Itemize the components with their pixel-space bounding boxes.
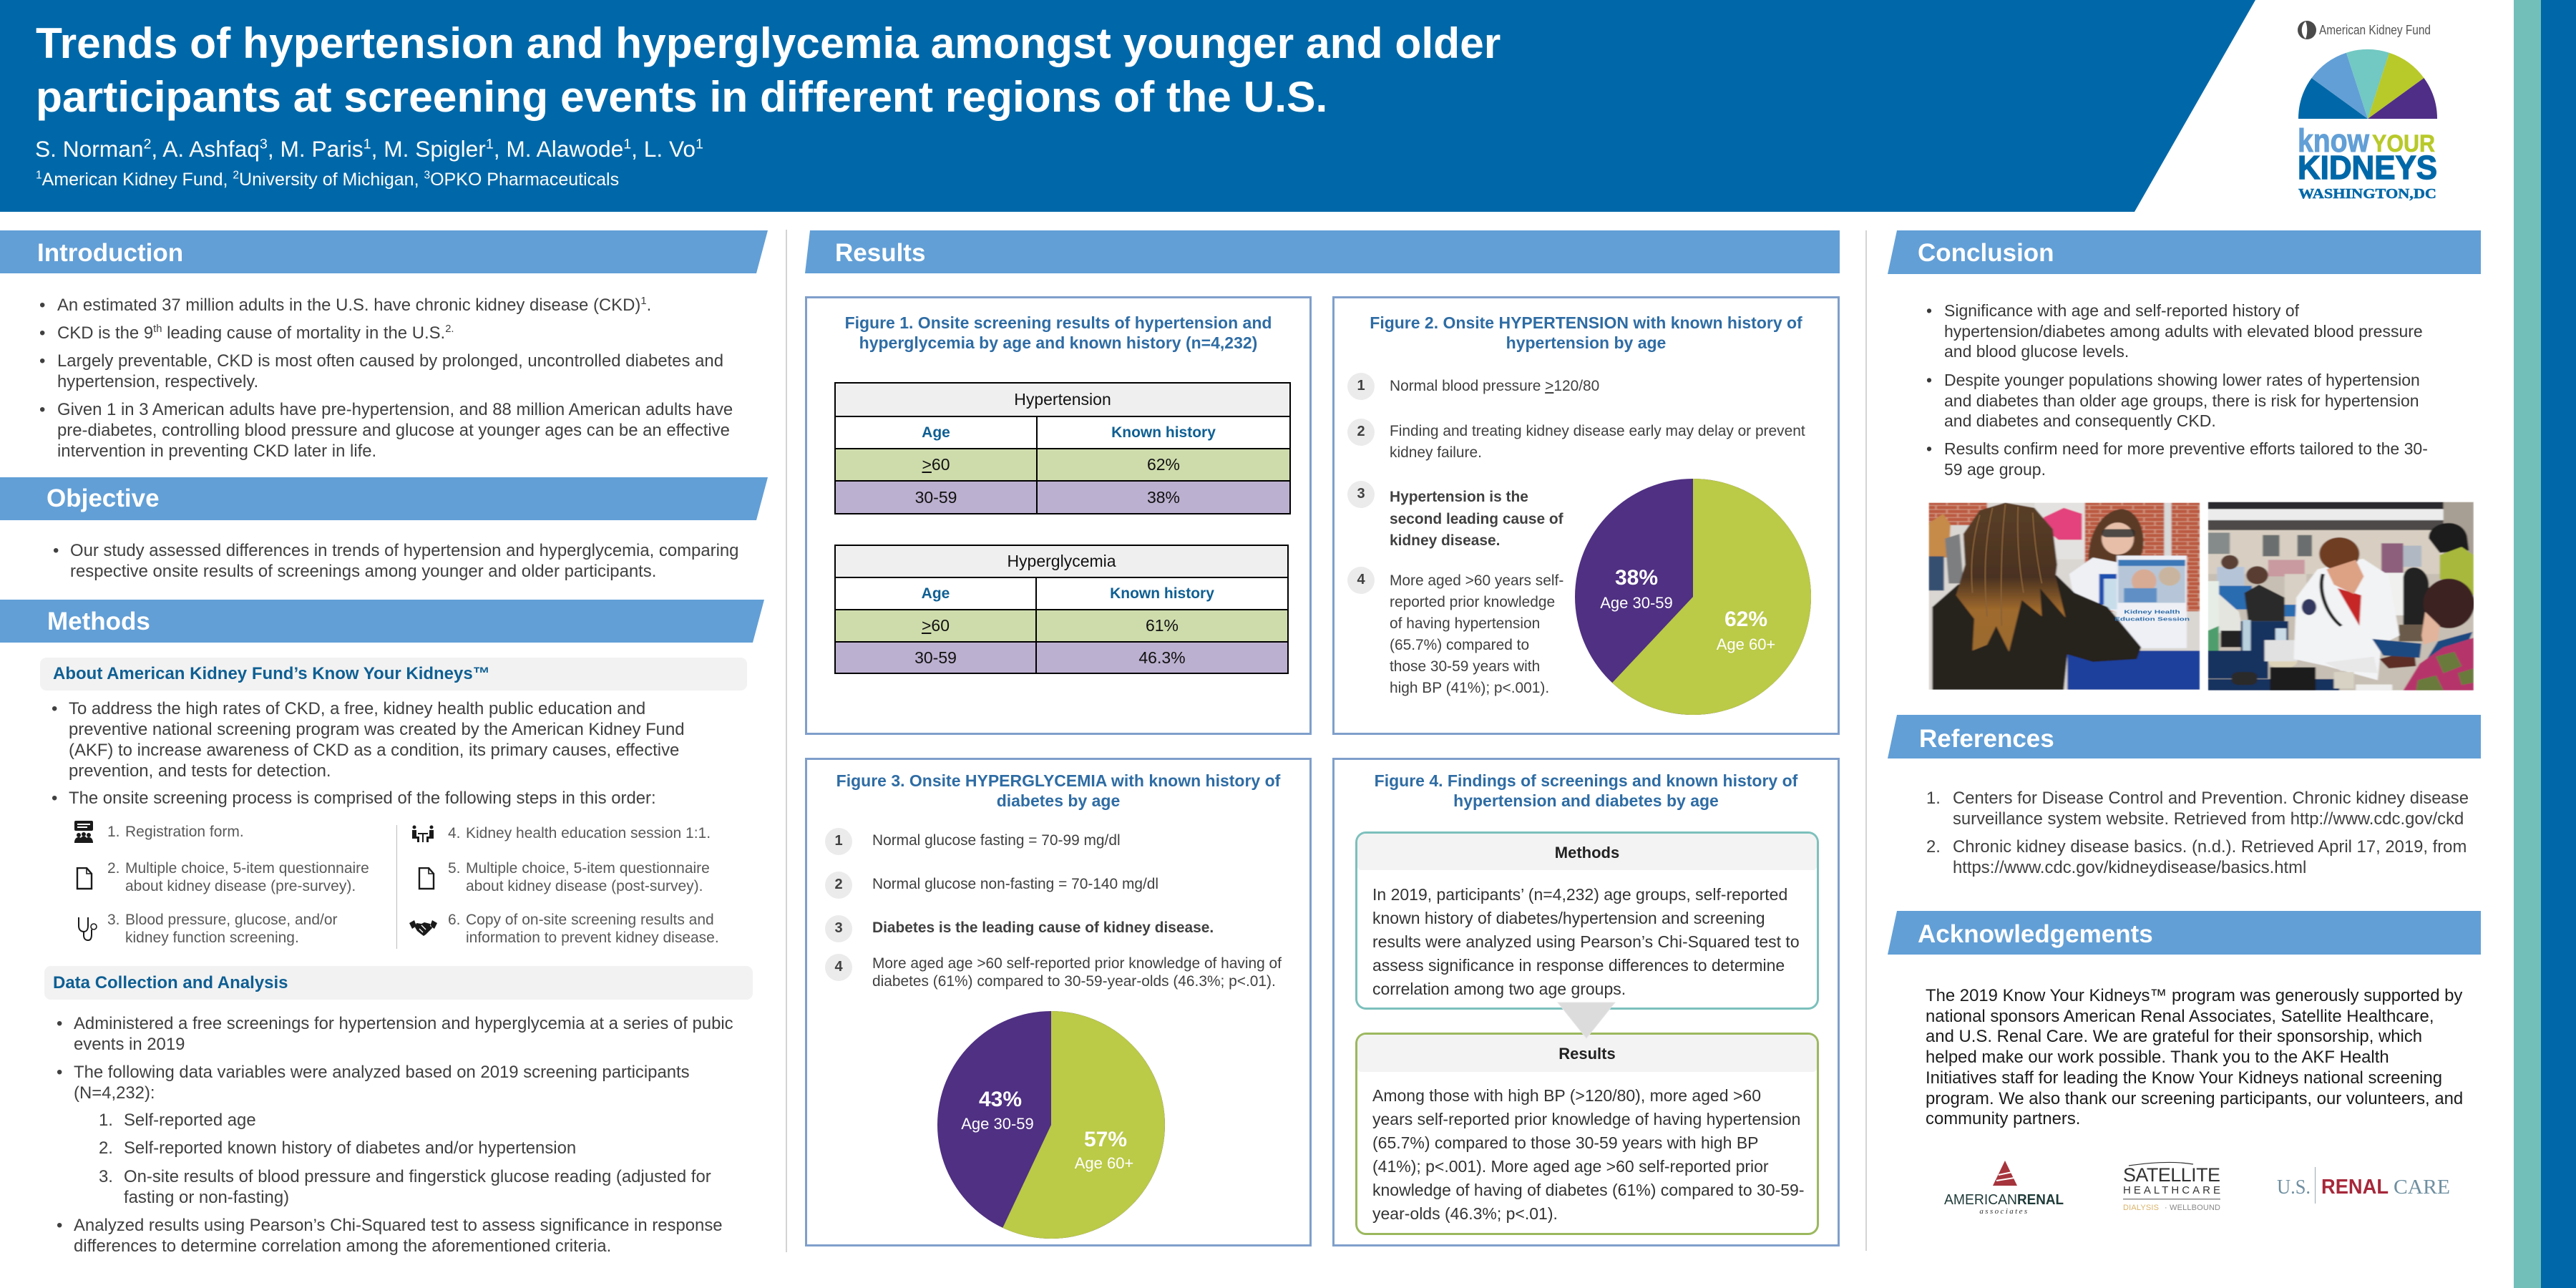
icon: American Kidney Fund mark: [2298, 21, 2316, 39]
table: hyperglycemia: >60: [922, 616, 950, 635]
logo wordmark: KIDNEYS: [2298, 149, 2437, 186]
pie chart: hypertension by age: [1575, 479, 1811, 715]
panel: Figure 2: [1332, 296, 1840, 735]
about bullets: [52, 699, 685, 808]
conclusion bullets: •: [1926, 371, 1932, 389]
step 1 with registration icon: Registration form.: [125, 824, 244, 840]
objective bullet: respective onsite results of screenings among younger and older participants.: [70, 562, 656, 581]
about bullets: preventive national screening program was created by the American Kidney Fund: [69, 720, 685, 739]
conclusion bullets: hypertension/diabetes among adults with elevated blood pressure: [1944, 322, 2423, 341]
heading: Objective: Objective: [47, 484, 160, 512]
point 3: 3: [1357, 486, 1365, 502]
point 1: Normal blood pressure >120/80: [1390, 378, 1599, 394]
point 4: 4: [1357, 572, 1365, 587]
heading: Introduction: Introduction: [37, 239, 183, 267]
data collection bullets: 1.: [99, 1111, 113, 1130]
figure 2 title: Figure 2. Onsite HYPERTENSION with known history of: [1370, 313, 1802, 332]
point 2: 2: [1357, 424, 1365, 439]
about bullets: •: [52, 699, 57, 718]
step 6 with handshake icon: [408, 911, 730, 948]
pie chart: hyperglycemia by age: 57%: [1084, 1128, 1127, 1151]
figure 3 title: [805, 771, 1312, 811]
point 3: [1347, 481, 1562, 552]
table: hyperglycemia: 61%: [1146, 616, 1179, 635]
point 3: 3: [834, 920, 843, 936]
point 2: kidney failure.: [1390, 444, 1482, 461]
data collection bullets: Administered a free screenings for hypertension and hyperglycemia at a series of pubic: [74, 1014, 733, 1033]
logo: Satellite Healthcare: [2118, 1159, 2225, 1214]
panel: Figure 1: [805, 296, 1312, 735]
methods box: [1355, 831, 1819, 1010]
table: hyperglycemia: Known history: [1110, 585, 1214, 601]
data collection bullets: Analyzed results using Pearson’s Chi-Squared test to assess significance in response: [74, 1216, 723, 1235]
step 2 with document icon: [72, 859, 386, 897]
introduction bullets: pre-diabetes, controlling blood pressure and glucose at younger ages can be an effective: [57, 421, 730, 440]
acknowledgements text: and U.S. Renal Care. We are grateful for their sponsorship, which: [1926, 1027, 2422, 1046]
conclusion bullets: •: [1926, 439, 1932, 458]
conclusion bullets: Significance with age and self-reported history of: [1944, 301, 2299, 320]
divider: [396, 825, 397, 949]
logo: Know Your Kidneys Washington DC: [2298, 21, 2437, 202]
step 1 with registration icon: [72, 820, 386, 845]
point 3: Diabetes is the leading cause of kidney disease.: [872, 919, 1214, 936]
point 4: of having hypertension: [1390, 615, 1540, 632]
table: hypertension: 30-59: [915, 488, 957, 507]
about bullets: prevention, and tests for detection.: [69, 761, 331, 781]
table: hyperglycemia: Hyperglycemia: [1007, 552, 1116, 570]
methods box text: [1372, 883, 1800, 1001]
results box: [1355, 1033, 1819, 1235]
table: hypertension: >60: [922, 455, 950, 474]
point 4: 4: [834, 959, 843, 975]
heading: References: [1888, 715, 2481, 758]
data collection bullets: •: [57, 1014, 62, 1033]
step 6 with handshake icon: information to prevent kidney disease.: [466, 930, 719, 946]
about bullets: To address the high rates of CKD, a free, kidney health public education and: [69, 699, 645, 718]
introduction bullets: •: [39, 400, 45, 419]
table: hyperglycemia: 30-59: [914, 648, 957, 667]
heading: Objective: [0, 477, 768, 520]
data collection bullets: •: [57, 1063, 62, 1082]
results box text: year-olds (46.3%; p<.01).: [1372, 1204, 1558, 1223]
header banner: [0, 0, 2255, 212]
acknowledgements text: Initiatives staff for leading the Know Your Kidneys national screening: [1926, 1068, 2442, 1088]
introduction bullets: •: [39, 296, 45, 315]
poster text in photo: [2114, 609, 2190, 623]
acknowledgements text: helped make our work possible. Thank you to the AKF Health: [1926, 1048, 2389, 1067]
introduction bullets: •: [39, 351, 45, 371]
data collection bullets: Self-reported age: [124, 1111, 256, 1130]
about bullets: •: [52, 789, 57, 808]
methods box text: In 2019, participants’ (n=4,232) age groups, self-reported: [1372, 885, 1787, 904]
step 5 with document icon: Multiple choice, 5-item questionnaire: [466, 860, 710, 877]
data collection bullets: The following data variables were analyzed based on 2019 screening participants: [74, 1063, 690, 1082]
step 4 with consultation icon: Kidney health education session 1:1.: [466, 825, 711, 841]
point 4: [1347, 567, 1562, 703]
heading: Conclusion: Conclusion: [1918, 239, 2054, 267]
references list: Chronic kidney disease basics. (n.d.). Retrieved April 17, 2019, from: [1953, 837, 2467, 857]
introduction bullets: Given 1 in 3 American adults have pre-hypertension, and 88 million American adults have: [57, 400, 733, 419]
figure 2 title: hypertension by age: [1506, 333, 1666, 352]
column separators: [786, 230, 787, 1252]
conclusion bullets: and diabetes and consequently CKD.: [1944, 411, 2216, 430]
pie chart: hyperglycemia by age: [937, 1011, 1165, 1239]
photos of screening events: [1918, 494, 2490, 701]
figure 4 title: hypertension and diabetes by age: [1453, 791, 1719, 810]
step 4 with consultation icon: 4.: [448, 825, 461, 841]
pie chart: hypertension by age: 62%: [1724, 608, 1767, 631]
introduction bullets: An estimated 37 million adults in the U.S. have chronic kidney disease (CKD)1.: [57, 296, 651, 315]
acknowledgements text: program. We also thank our screening participants, our volunteers, and: [1926, 1089, 2463, 1108]
figure 1 title: hyperglycemia by age and known history (n=4,232): [859, 333, 1257, 352]
data collection bullets: (N=4,232):: [74, 1083, 155, 1103]
title: participants at screening events in different regions of the U.S.: [36, 72, 1327, 121]
data collection bullets: [57, 1014, 743, 1261]
logo: U.S. Renal Care: [2272, 1163, 2458, 1207]
affiliations: 1American Kidney Fund, 2University of Michigan, 3OPKO Pharmaceuticals: [36, 170, 619, 190]
step 2 with document icon: Multiple choice, 5-item questionnaire: [125, 860, 369, 877]
introduction bullets: CKD is the 9th leading cause of mortality in the U.S.2.: [57, 323, 454, 343]
table: hypertension: [834, 382, 1291, 514]
heading: Results: [805, 230, 1840, 273]
point 4: More aged >60 years self-: [1390, 572, 1563, 589]
point 4: (65.7%) compared to: [1390, 637, 1529, 653]
screening steps list: [74, 821, 719, 949]
subheading: About Know Your Kidneys: [40, 658, 747, 691]
step 1 with registration icon: 1.: [107, 824, 120, 840]
results box text: (41%); p<.001). More aged age >60 self-reported prior: [1372, 1157, 1769, 1176]
figure 3 title: diabetes by age: [997, 791, 1120, 810]
table: hypertension: Hypertension: [1014, 390, 1111, 409]
table: hypertension: Known history: [1111, 424, 1216, 441]
logo wordmark: know: [2298, 122, 2370, 159]
results box text: years self-reported prior knowledge of having hypertension: [1372, 1110, 1800, 1128]
conclusion bullets: and diabetes than older age groups, there is risk for hypertension: [1944, 391, 2419, 410]
introduction bullets: •: [39, 323, 45, 343]
introduction bullets: [39, 296, 733, 461]
step 2 with document icon: 2.: [107, 860, 120, 877]
step 4 with consultation icon: [408, 821, 730, 847]
conclusion bullets: Results confirm need for more preventive efforts tailored to the 30-: [1944, 439, 2428, 458]
photo: blood pressure check: [2208, 502, 2474, 691]
poster text in photo: Education Session: [2114, 616, 2190, 623]
about bullets: The onsite screening process is comprised of the following steps in this order:: [69, 789, 656, 808]
logo: U.S. Renal Care: RENAL: [2321, 1176, 2389, 1199]
point 4: high BP (41%); p<.001).: [1390, 680, 1549, 696]
conclusion bullets: and blood glucose levels.: [1944, 342, 2129, 361]
logo: Satellite Healthcare: · WELLBOUND: [2165, 1204, 2220, 1212]
introduction bullets: hypertension, respectively.: [57, 372, 258, 391]
logo wordmark: WASHINGTON,DC: [2298, 186, 2436, 202]
methods box text: correlation among two age groups.: [1372, 980, 1626, 998]
conclusion bullets: •: [1926, 301, 1932, 320]
point 2: [825, 872, 1183, 899]
acknowledgements text: The 2019 Know Your Kidneys™ program was generously supported by: [1926, 986, 2462, 1005]
data collection bullets: On-site results of blood pressure and fingerstick glucose reading (adjusted for: [124, 1167, 711, 1186]
point 4: those 30-59 years with: [1390, 658, 1540, 675]
photo: kidney health education session: [1928, 503, 2200, 690]
poster text in photo: Kidney Health: [2124, 609, 2180, 615]
authors: S. Norman2, A. Ashfaq3, M. Paris1, M. Spigler1, M. Alawode1, L. Vo1: [35, 136, 703, 162]
logo: U.S. Renal Care: U.S.: [2277, 1176, 2311, 1199]
methods box heading: [1357, 834, 1817, 870]
table: hypertension: 38%: [1147, 488, 1180, 507]
figure 4 title: Figure 4. Findings of screenings and known history of: [1375, 771, 1797, 790]
subheading: About Know Your Kidneys: About American Kidney Fund’s Know Your Kidneys™: [53, 664, 490, 683]
step 3 with stethoscope icon: Blood pressure, glucose, and/or: [125, 912, 338, 928]
point 1: 1: [1357, 378, 1365, 394]
point 1: [1347, 373, 1634, 400]
heading: Results: Results: [835, 239, 925, 267]
point 2: 2: [834, 877, 843, 892]
methods box text: known history of diabetes/hypertension and screening: [1372, 909, 1765, 927]
references list: Centers for Disease Control and Prevention. Chronic kidney disease: [1953, 789, 2469, 808]
methods box heading: Methods: [1555, 844, 1619, 862]
table: hypertension: 62%: [1147, 455, 1180, 474]
point 3: Hypertension is the: [1390, 489, 1528, 505]
table: hyperglycemia: 46.3%: [1138, 648, 1186, 667]
data collection bullets: events in 2019: [74, 1035, 185, 1054]
logo: Satellite Healthcare: HEALTHCARE: [2123, 1184, 2220, 1196]
table: hyperglycemia: Age: [922, 585, 950, 601]
results box text: Among those with high BP (>120/80), more aged >60: [1372, 1086, 1761, 1105]
methods box text: results were analyzed using Pearson’s Chi-Squared test to: [1372, 932, 1800, 951]
point 2: [1347, 419, 1805, 469]
figure 1 title: Figure 1. Onsite screening results of hypertension and: [845, 313, 1272, 332]
step 5 with document icon: about kidney disease (post-survey).: [466, 878, 703, 894]
references list: [1926, 788, 2477, 881]
title: Trends of hypertension and hyperglycemia amongst younger and older: [36, 19, 1501, 67]
objective bullet: [53, 541, 738, 581]
heading: References: References: [1919, 725, 2054, 753]
data collection bullets: differences to determine correlation among the aforementioned criteria.: [74, 1236, 611, 1256]
references list: 1.: [1926, 789, 1941, 808]
heading: Conclusion: [1888, 230, 2481, 274]
subheading: Data Collection and Analysis: [44, 966, 753, 1000]
data collection bullets: •: [57, 1216, 62, 1235]
panel: Figure 3: [805, 758, 1312, 1246]
point 4: diabetes (61%) compared to 30-59-year-olds (46.3%; p<.01).: [872, 973, 1276, 990]
pie chart: hyperglycemia by age: 43%: [979, 1088, 1022, 1111]
references list: 2.: [1926, 837, 1941, 857]
step 6 with handshake icon: 6.: [448, 912, 461, 928]
results box text: [1372, 1084, 1804, 1226]
step 5 with document icon: [408, 859, 730, 897]
conclusion bullets: [1926, 301, 2470, 487]
figure 2 title: [1332, 313, 1840, 353]
conclusion bullets: 59 age group.: [1944, 460, 2046, 479]
pie chart: hyperglycemia by age: Age 60+: [1075, 1154, 1133, 1172]
point 2: Normal glucose non-fasting = 70-140 mg/dl: [872, 876, 1158, 892]
results box heading: Results: [1558, 1045, 1616, 1063]
point 3: kidney disease.: [1390, 532, 1500, 549]
pie chart: hyperglycemia by age: Age 30-59: [961, 1115, 1034, 1133]
data collection bullets: 2.: [99, 1138, 113, 1158]
table: hypertension: Age: [922, 424, 950, 441]
objective bullet: •: [53, 541, 59, 560]
results box text: (65.7%) compared to those 30-59 years with high BP: [1372, 1133, 1759, 1152]
pie chart: hypertension by age: Age 60+: [1717, 635, 1775, 653]
references list: https://www.cdc.gov/kidneydisease/basics.html: [1953, 858, 2306, 877]
data collection bullets: Self-reported known history of diabetes and/or hypertension: [124, 1138, 576, 1158]
references list: surveillance system website. Retrieved from http://www.cdc.gov/ckd: [1953, 809, 2464, 829]
logo: American Renal Associates: associates: [1979, 1207, 2029, 1216]
logo wordmark: [2298, 122, 2437, 202]
point 4: More aged age >60 self-reported prior knowledge of having of: [872, 955, 1282, 972]
results box heading: [1357, 1035, 1817, 1072]
heading: Acknowledgements: [1888, 911, 2481, 955]
results box text: knowledge of having of diabetes (61%) compared to 30-59-: [1372, 1181, 1804, 1199]
step 3 with stethoscope icon: kidney function screening.: [125, 930, 299, 946]
point 1: 1: [834, 833, 843, 849]
point 4: reported prior knowledge: [1390, 594, 1555, 610]
point 3: [825, 915, 1183, 942]
arrow from methods to results: [1557, 1002, 1616, 1039]
step 3 with stethoscope icon: 3.: [107, 912, 120, 928]
acknowledgements text: community partners.: [1926, 1109, 2080, 1128]
logo: American Renal Associates: [1939, 1158, 2068, 1219]
figure 1 title: [805, 313, 1312, 353]
acknowledgements text: national sponsors American Renal Associates, Satellite Healthcare,: [1926, 1007, 2434, 1026]
logo: Satellite Healthcare: DIALYSIS: [2123, 1204, 2159, 1212]
hair strands: [1971, 504, 2041, 626]
right edge stripes: [2514, 0, 2576, 1288]
logo: Satellite Healthcare: SATELLITE: [2123, 1164, 2220, 1186]
fan of five colored segments: [2298, 49, 2437, 119]
panel: Figure 4: [1332, 758, 1840, 1246]
logo: American Renal Associates: RENAL: [2017, 1192, 2064, 1208]
point 1: Normal glucose fasting = 70-99 mg/dl: [872, 832, 1121, 849]
heading: Methods: Methods: [47, 608, 150, 635]
about bullets: (AKF) to increase awareness of CKD as a condition, its primary causes, effective: [69, 741, 679, 760]
pie chart: hypertension by age: Age 30-59: [1600, 594, 1673, 612]
objective bullet: Our study assessed differences in trends of hypertension and hyperglycemia, comparing: [70, 541, 738, 560]
title: [36, 26, 1500, 121]
logo: American Renal Associates: AMERICAN: [1944, 1192, 2017, 1208]
introduction bullets: intervention in preventing CKD later in life.: [57, 441, 376, 461]
point 1: [825, 828, 1183, 855]
acknowledgements text: [1926, 986, 2477, 1131]
step 5 with document icon: 5.: [448, 860, 461, 877]
figure 4 title: [1332, 771, 1840, 811]
step 2 with document icon: about kidney disease (pre-survey).: [125, 878, 356, 894]
point 3: second leading cause of: [1390, 511, 1563, 527]
heading: Acknowledgements: Acknowledgements: [1918, 920, 2153, 948]
conclusion bullets: Despite younger populations showing lower rates of hypertension: [1944, 371, 2420, 389]
step 6 with handshake icon: Copy of on-site screening results and: [466, 912, 714, 928]
point 2: Finding and treating kidney disease early may delay or prevent: [1390, 423, 1805, 439]
pie chart: hypertension by age: 38%: [1615, 566, 1658, 590]
figure 3 title: Figure 3. Onsite HYPERGLYCEMIA with known history of: [836, 771, 1280, 790]
data collection bullets: fasting or non-fasting): [124, 1188, 289, 1207]
data collection bullets: 3.: [99, 1167, 113, 1186]
heading: Methods: [0, 600, 764, 643]
table: hyperglycemia: [834, 545, 1289, 674]
methods box text: assess significance in response differences to determine: [1372, 956, 1785, 975]
point 4: [825, 954, 1290, 993]
subheading: Data Collection and Analysis: Data Collection and Analysis: [53, 973, 288, 992]
step 3 with stethoscope icon: [72, 911, 386, 948]
logo wordmark: YOUR: [2372, 130, 2435, 157]
logo: U.S. Renal Care: CARE: [2394, 1176, 2450, 1199]
heading: Introduction: [0, 230, 768, 273]
introduction bullets: Largely preventable, CKD is most often caused by prolonged, uncontrolled diabetes and: [57, 351, 723, 371]
